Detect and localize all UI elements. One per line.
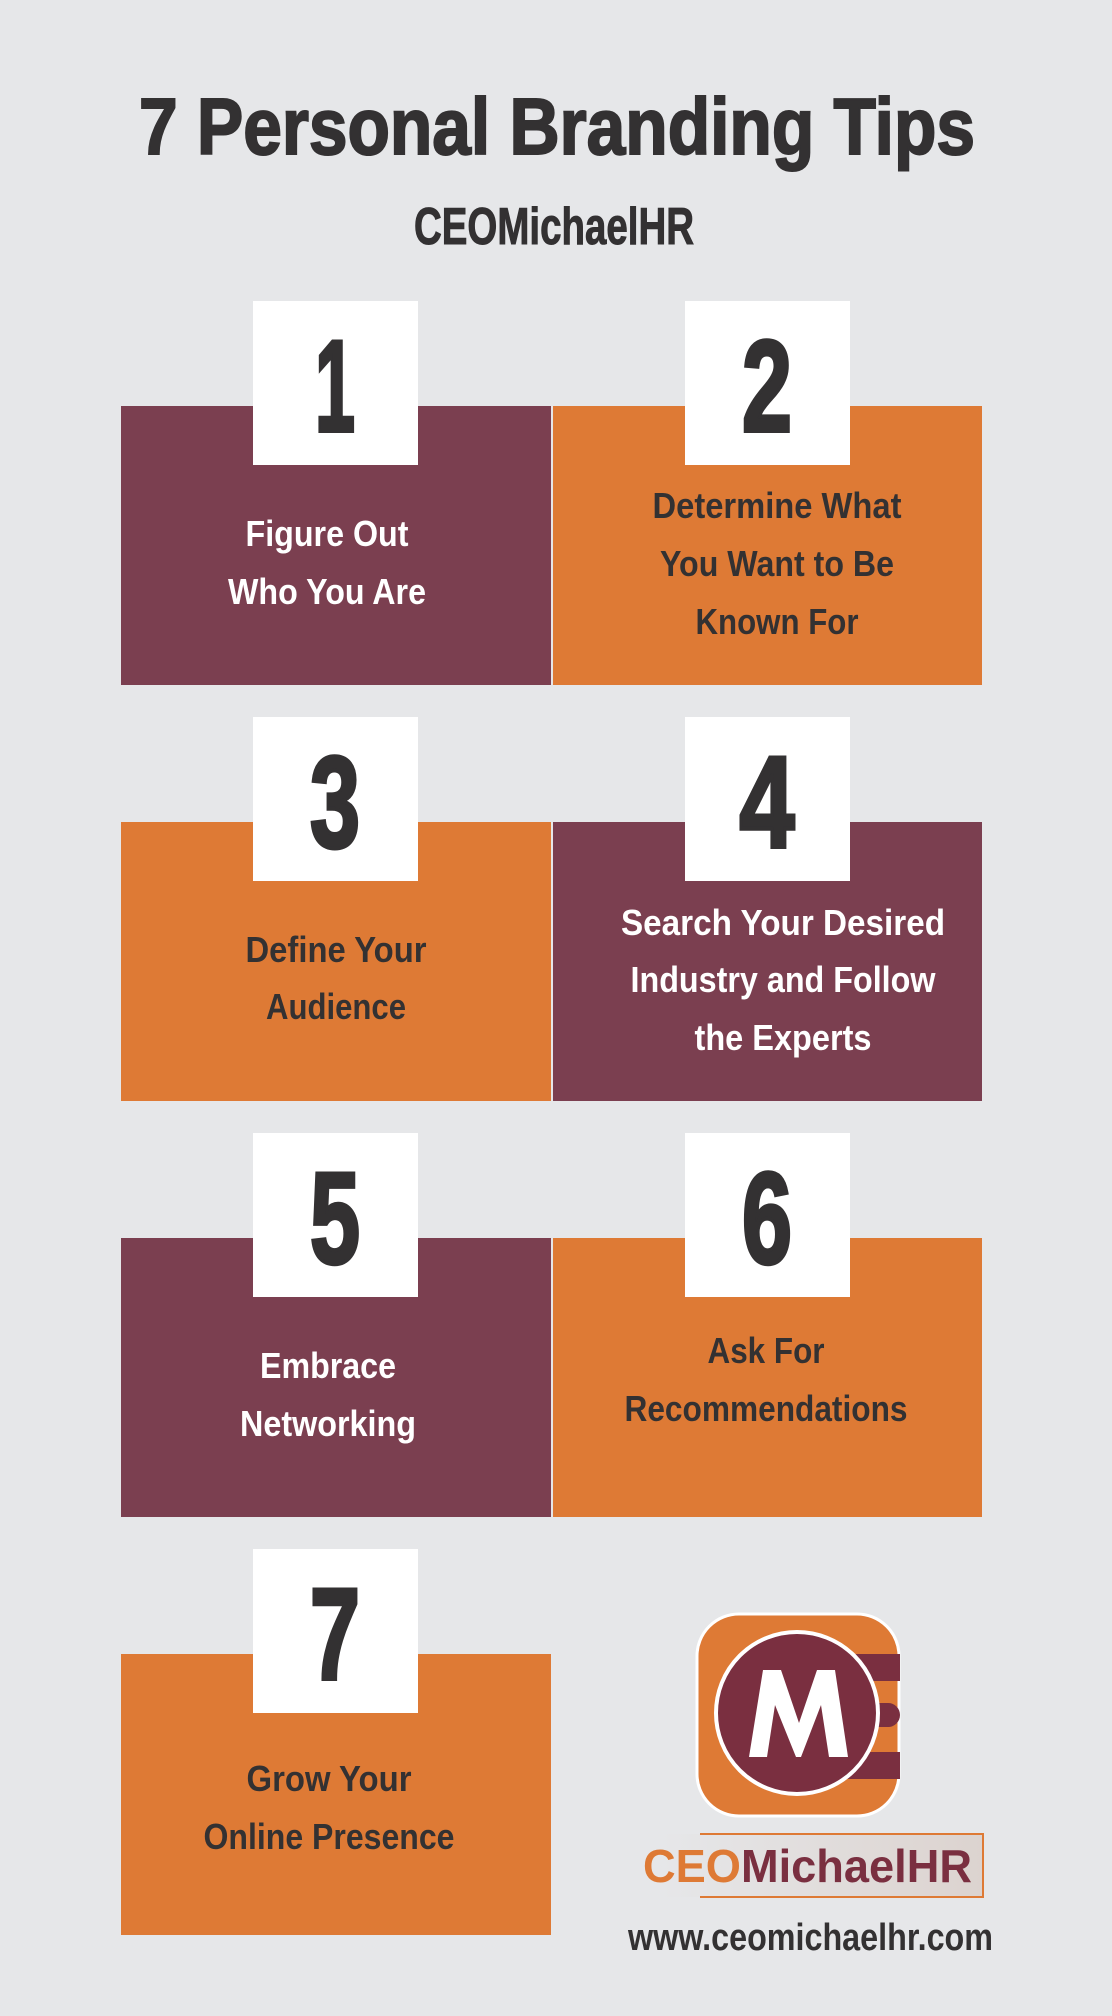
panel: tip 6 [553, 1133, 982, 1517]
panel: tip 4: the Experts [694, 1017, 872, 1058]
panel: tip 2: Determine What [652, 485, 902, 526]
panel: tip 5: 5 [310, 1145, 360, 1291]
panel: tip 3: Audience [266, 986, 406, 1027]
panel: tip 2 [553, 301, 982, 685]
panel: tip 6: Ask For [708, 1330, 824, 1371]
panel: tip 6: 6 [742, 1145, 792, 1291]
panel: tip 4: Industry and Follow [630, 959, 936, 1000]
panel: tip 5: Networking [240, 1403, 416, 1444]
panel: tip 2: 2 [742, 313, 792, 459]
icon: CEOMichaelHR logo [697, 1614, 900, 1816]
panel: tip 1: Figure Out [246, 513, 408, 554]
panel: tip 7: 7 [310, 1561, 360, 1707]
website url: www.ceomichaelhr.com [627, 1917, 993, 1959]
panel: tip 5: Embrace [260, 1345, 396, 1386]
panel: tip 7: Online Presence [204, 1816, 454, 1857]
panel: tip 6: Recommendations [624, 1388, 908, 1429]
panel: tip 4: 4 [740, 729, 794, 875]
subtitle: CEOMichaelHR [414, 198, 694, 256]
panel: tip 7: Grow Your [246, 1758, 412, 1799]
panel: tip 1: 1 [315, 313, 355, 459]
panel: tip 1 [121, 301, 551, 685]
panel: tip 1: Who You Are [228, 571, 426, 612]
panel: tip 2: Known For [696, 601, 858, 642]
panel: tip 2: You Want to Be [660, 543, 894, 584]
panel: tip 3: Define Your [246, 929, 426, 970]
panel: tip 4 [553, 717, 982, 1101]
panel: tip 4: Search Your Desired [621, 902, 945, 943]
panel: tip 3: 3 [310, 729, 360, 875]
panel: tip 3 [121, 717, 551, 1101]
logo banner: CEOMichaelHR [643, 1840, 972, 1892]
title: 7 Personal Branding Tips [139, 82, 975, 171]
panel: tip 5 [121, 1133, 551, 1517]
panel: tip 7 [121, 1549, 551, 1935]
